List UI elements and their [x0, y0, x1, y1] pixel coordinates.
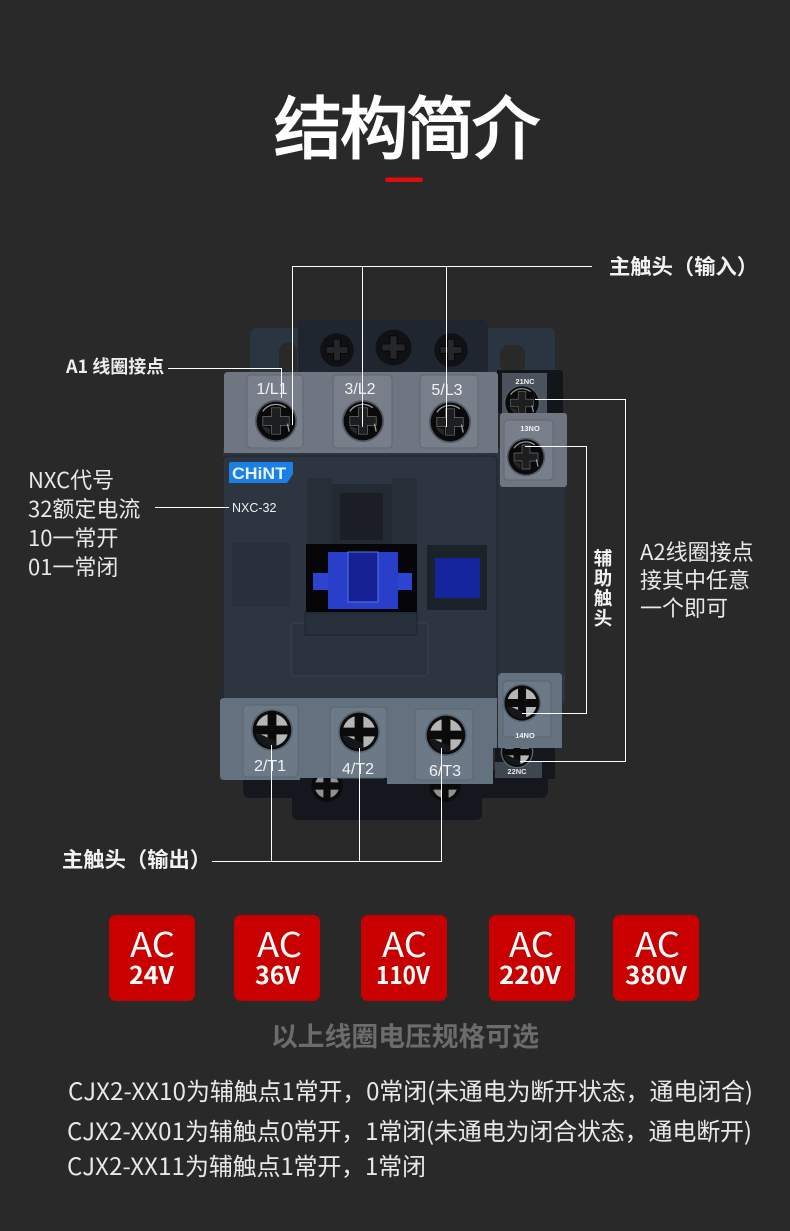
badge: AC 24V: AC: [130, 918, 175, 967]
main body: [223, 448, 565, 703]
text block: A2 coil contact: 接其中任意: [640, 563, 750, 595]
badge: AC 220V: AC: [509, 918, 554, 967]
text block: model code explanation: NXC代号: [28, 463, 114, 495]
lower terminal screws: [251, 709, 467, 756]
text block: A2 coil contact: A2线圈接点: [640, 535, 754, 567]
lower terminal labels: 2/T1: [254, 758, 286, 775]
voltage badges: [109, 915, 699, 1001]
badge: AC 110V: AC: [382, 918, 427, 967]
text block: A2 coil contact: [640, 535, 754, 623]
upper auxiliary contact 21NC: [497, 370, 563, 421]
main contact output leader: [212, 745, 442, 862]
top terminal block: [298, 320, 488, 378]
auxiliary contact 14NO: [498, 673, 562, 748]
text block: model code explanation: [28, 463, 140, 582]
text block: A2 coil contact: 一个即可: [640, 591, 728, 623]
leader lines: [155, 266, 626, 862]
badge: AC 36V: [234, 915, 320, 1001]
label: auxiliary contact vertical: 触: [594, 585, 613, 611]
upper auxiliary contact 21NC: 21NC: [515, 377, 535, 386]
upper terminal labels: 1/L1: [256, 381, 288, 398]
upper terminal labels: [256, 381, 463, 399]
lower auxiliary contact 22NC: 22NC: [507, 767, 527, 776]
lower latch: [291, 613, 428, 676]
auxiliary contact 13NO: [500, 413, 567, 487]
badge: AC 36V: 36V: [255, 956, 300, 991]
badge: AC 220V: [489, 915, 575, 1001]
text block: model code explanation: 01一常闭: [28, 550, 118, 582]
label: auxiliary contact vertical: 辅: [594, 545, 612, 571]
lower terminal labels: 6/T3: [429, 763, 461, 780]
badge: AC 220V: 220V: [499, 956, 561, 991]
lower terminal recesses: [243, 705, 473, 780]
title: 结构简介: [274, 74, 540, 173]
lower terminal labels: 4/T2: [342, 761, 374, 778]
bottom rear housing: [243, 770, 548, 820]
main contact input leader: [292, 266, 592, 427]
label: auxiliary contact vertical: 头: [594, 605, 612, 631]
badge: AC 380V: AC: [635, 918, 680, 967]
label: main contact output: 主触头（输出）: [62, 843, 211, 874]
blue actuator: [313, 552, 412, 609]
badge: AC 380V: [613, 915, 699, 1001]
A1 leader: [168, 368, 282, 398]
contactor product illustration: [220, 320, 567, 820]
lower terminal labels: [254, 758, 461, 780]
auxiliary contact leader: [522, 446, 586, 714]
badge: AC 24V: [109, 915, 195, 1001]
badge: AC 24V: 24V: [129, 956, 174, 991]
upper terminal labels: 5/L3: [431, 382, 463, 399]
left window: [232, 543, 290, 607]
right side column: [497, 485, 565, 675]
right window: [427, 545, 487, 610]
badge: AC 380V: 380V: [625, 956, 687, 991]
upper terminal screws: [255, 400, 471, 443]
lower auxiliary contact 22NC: [495, 736, 555, 779]
badge: AC 36V: AC: [257, 918, 302, 967]
badge: AC 110V: 110V: [376, 956, 430, 991]
text block: model code explanation: 32额定电流: [28, 492, 140, 524]
front face: [223, 456, 497, 700]
actuator guide rails: [307, 478, 417, 544]
title accent bar: [385, 178, 423, 182]
upper terminal labels: 3/L2: [344, 381, 376, 398]
model leader: [155, 506, 229, 508]
auxiliary contact notes: CJX2-XX01为辅触点0常开，1常闭(未通电为闭合状态，通电断开): [67, 1112, 752, 1147]
voltage note: 以上线圈电压规格可选: [271, 1015, 539, 1054]
auxiliary contact 13NO: 13NO: [520, 424, 540, 433]
label: auxiliary contact vertical: [594, 545, 613, 631]
central window: [306, 544, 417, 612]
upper terminal recesses: [247, 375, 478, 448]
text block: model code explanation: 10一常开: [28, 521, 118, 553]
auxiliary contact notes: CJX2-XX11为辅触点1常开，1常闭: [67, 1147, 426, 1182]
rear mounting plate: [250, 328, 555, 378]
CHINT logo: CHiNT: [232, 464, 287, 483]
badge: AC 110V: [361, 915, 447, 1001]
lower terminal band: [220, 698, 497, 784]
mounting slots: [279, 343, 525, 375]
auxiliary contact 14NO: 14NO: [515, 731, 535, 740]
label: auxiliary contact vertical: 助: [594, 565, 612, 591]
rear top screws: [320, 330, 468, 367]
label: A1 coil contact: A1 线圈接点: [65, 353, 164, 379]
auxiliary contact notes: [67, 1072, 753, 1182]
auxiliary contact notes: CJX2-XX10为辅触点1常开，0常闭(未通电为断开状态，通电闭合): [68, 1072, 753, 1107]
rear bottom screws: [311, 770, 461, 802]
upper terminal band: [224, 372, 498, 453]
label: main contact input: 主触头（输入）: [609, 250, 758, 281]
model label: NXC-32: [232, 501, 277, 515]
A2 leader: [520, 400, 626, 762]
